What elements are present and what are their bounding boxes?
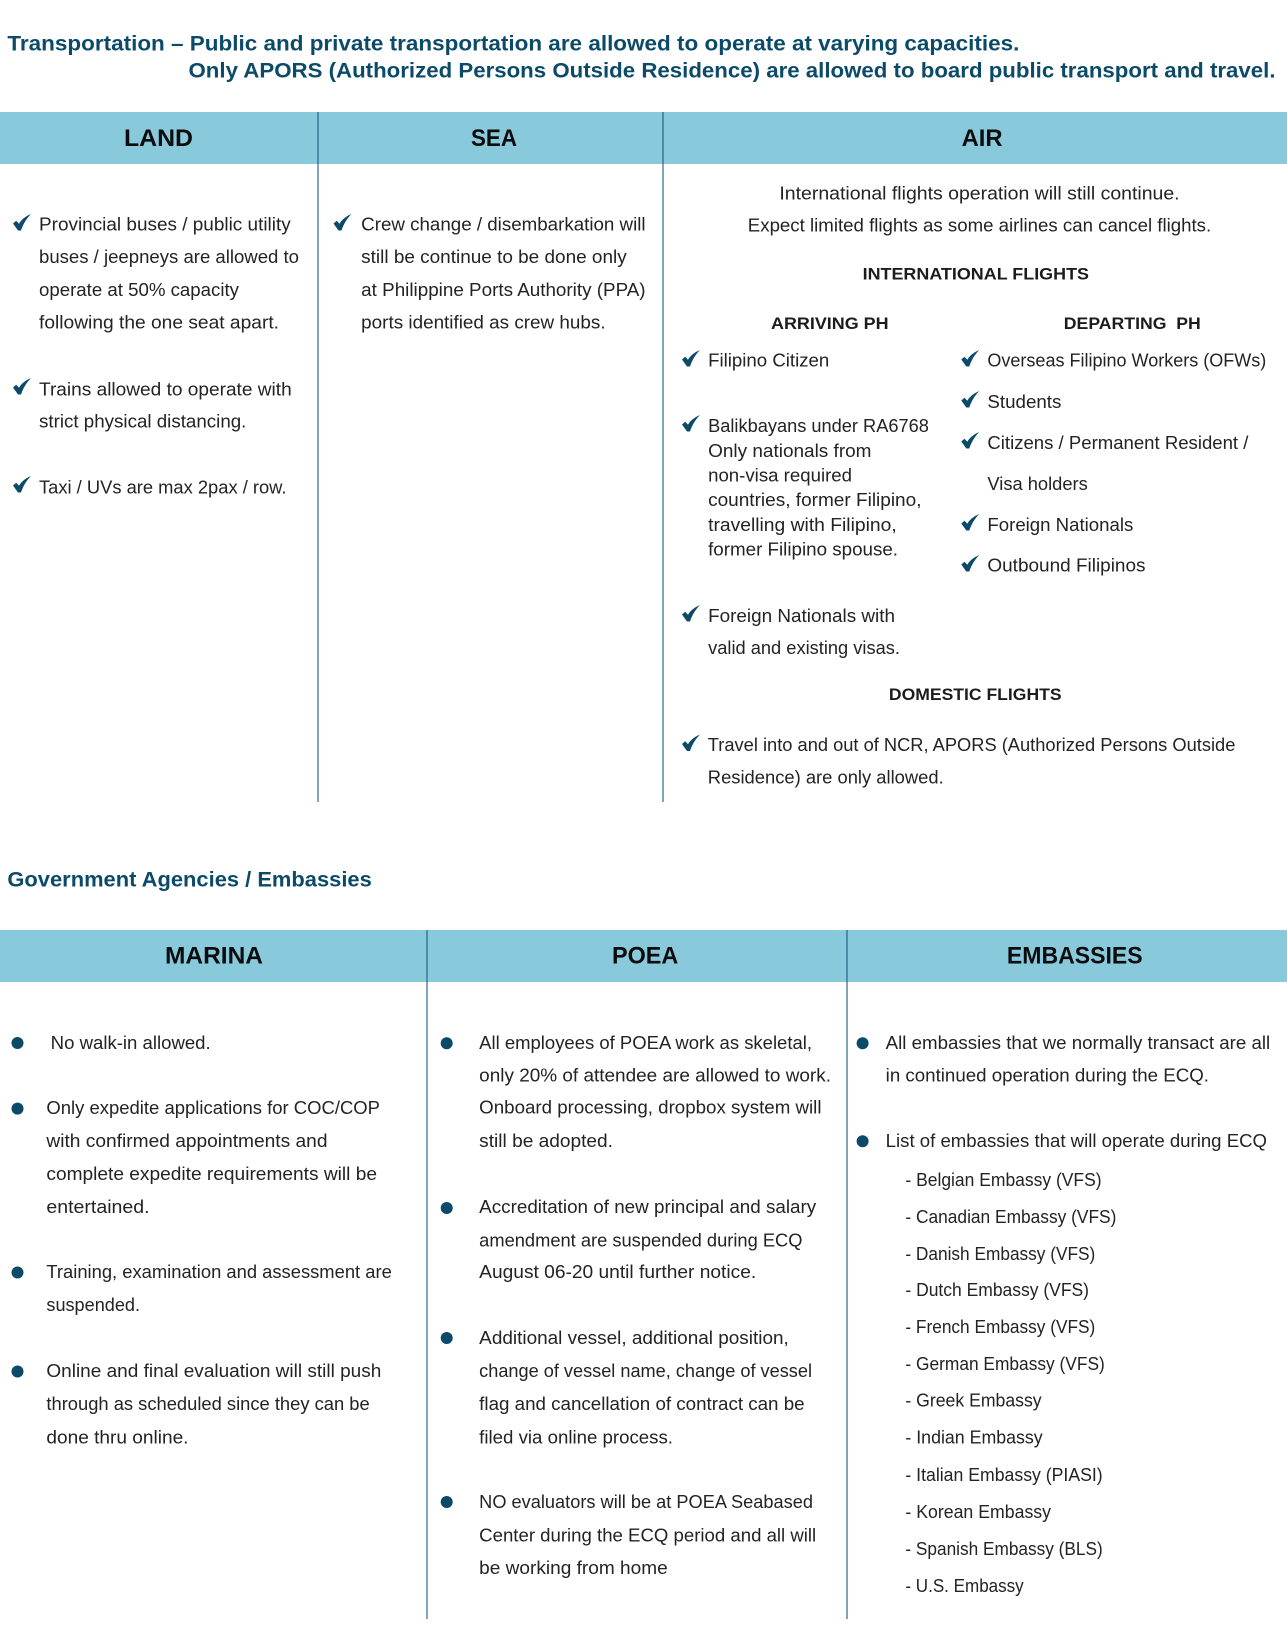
list of embassies — [905, 1170, 1116, 1596]
list of embassies: - French Embassy (VFS) — [905, 1317, 1095, 1337]
item: travel into and out of ncr: Travel into and out of NCR, APORS (Authorized Persons Outside — [708, 735, 1235, 755]
air intro text — [748, 184, 1211, 236]
item: expedite applications: with confirmed appointments and — [45, 1131, 328, 1151]
item: accreditation: August 06-20 until further notice. — [479, 1262, 756, 1282]
header: sea: SEA — [471, 125, 517, 152]
subheading: departing ph: DEPARTING PH — [1064, 314, 1201, 333]
panel: marina — [0, 930, 427, 1448]
item: provincial buses — [13, 214, 299, 333]
header: marina: MARINA — [165, 942, 263, 969]
item: citizens: Citizens / Permanent Resident / — [987, 433, 1248, 453]
item: expedite applications: entertained. — [46, 1197, 150, 1217]
item: no evaluators: Center during the ECQ period and all will — [479, 1526, 816, 1546]
item: crew change: at Philippine Ports Authority (PPA) — [361, 280, 646, 300]
item: no evaluators: NO evaluators will be at POEA Seabased — [479, 1492, 813, 1512]
item: skeletal work: only 20% of attendee are allowed to work. — [479, 1065, 831, 1085]
item: continued operation: in continued operation during the ECQ. — [886, 1065, 1209, 1085]
header: poea: POEA — [612, 942, 678, 969]
item: continued operation: All embassies that we normally transact are all — [886, 1033, 1270, 1053]
header: sea — [318, 112, 663, 164]
list of embassies: - Spanish Embassy (BLS) — [905, 1539, 1103, 1559]
panel: air — [663, 112, 1287, 788]
panel: sea — [318, 112, 663, 333]
item: outbound filipinos: Outbound Filipinos — [987, 556, 1146, 576]
item: continued operation — [857, 1033, 1270, 1085]
item: travel into and out of ncr — [682, 734, 1235, 788]
item: additional vessel: filed via online process. — [479, 1428, 673, 1448]
item: online evaluation — [12, 1361, 381, 1448]
item: crew change — [334, 214, 646, 333]
list of embassies: - German Embassy (VFS) — [905, 1354, 1105, 1374]
item: balikbayans: countries, former Filipino, — [708, 490, 922, 510]
item: crew change: still be continue to be done only — [361, 247, 627, 267]
list of embassies: - Korean Embassy — [905, 1502, 1051, 1522]
title: transportation: Only APORS (Authorized Persons Outside Residence) are allowed to board public transport and travel. — [188, 59, 1276, 82]
item: foreign nationals with visas — [682, 605, 900, 658]
item: balikbayans — [682, 415, 929, 560]
item: trains: Trains allowed to operate with — [39, 379, 292, 399]
item: online evaluation: through as scheduled since they can be — [46, 1394, 370, 1414]
item: online evaluation: done thru online. — [46, 1428, 189, 1448]
item: additional vessel: Additional vessel, additional position, — [479, 1328, 789, 1348]
item: provincial buses: Provincial buses / public utility — [39, 215, 291, 235]
item: no evaluators — [441, 1492, 816, 1578]
item: expedite applications: complete expedite requirements will be — [46, 1164, 377, 1184]
list of embassies: - Italian Embassy (PIASI) — [905, 1465, 1103, 1485]
item: accreditation: amendment are suspended during ECQ — [479, 1231, 802, 1251]
item: additional vessel: flag and cancellation of contract can be — [479, 1394, 805, 1414]
panel: land — [0, 112, 318, 497]
item: list of embassies intro: List of embassies that will operate during ECQ — [886, 1131, 1267, 1151]
item: training — [12, 1262, 392, 1315]
item: skeletal work: Onboard processing, dropbox system will — [479, 1098, 822, 1118]
list of embassies: - Dutch Embassy (VFS) — [905, 1280, 1089, 1300]
item: crew change: Crew change / disembarkation will — [361, 215, 646, 235]
item: skeletal work: All employees of POEA work as skeletal, — [479, 1033, 812, 1053]
title: transportation: Transportation – Public and private transportation are allowed to operate at varying capacities. — [7, 32, 1019, 56]
list of embassies: - Indian Embassy — [905, 1428, 1043, 1448]
item: foreign nationals with visas: Foreign Nationals with — [708, 606, 895, 626]
panel: embassies — [847, 930, 1287, 1596]
item: citizens: Visa holders — [987, 474, 1088, 494]
item: filipino citizen: Filipino Citizen — [708, 351, 829, 371]
air intro text: International flights operation will still continue. — [779, 184, 1180, 204]
header: poea — [427, 930, 847, 982]
list of embassies: - Greek Embassy — [905, 1391, 1042, 1411]
item: travel into and out of ncr: Residence) are only allowed. — [708, 768, 944, 788]
item: skeletal work — [441, 1033, 831, 1151]
item: balikbayans: former Filipino spouse. — [708, 540, 898, 560]
title: transportation — [7, 32, 1275, 82]
item: trains: strict physical distancing. — [39, 412, 246, 432]
header: embassies: EMBASSIES — [1007, 942, 1143, 969]
item: citizens — [961, 432, 1248, 494]
item: training: suspended. — [46, 1295, 140, 1315]
item: students: Students — [987, 392, 1061, 412]
item: no walk-in: No walk-in allowed. — [51, 1033, 211, 1053]
item: expedite applications — [12, 1098, 380, 1217]
item: balikbayans: Balikbayans under RA6768 — [708, 416, 929, 436]
item: provincial buses: buses / jeepneys are allowed to — [39, 247, 299, 267]
header: marina — [0, 930, 427, 982]
item: balikbayans: travelling with Filipino, — [708, 515, 897, 535]
item: accreditation — [441, 1197, 816, 1282]
item: additional vessel: change of vessel name, change of vessel — [479, 1361, 812, 1381]
subheading: domestic flights: DOMESTIC FLIGHTS — [889, 685, 1062, 704]
item: accreditation: Accreditation of new principal and salary — [479, 1197, 816, 1217]
list of embassies: - Danish Embassy (VFS) — [905, 1244, 1095, 1264]
item: ofws: Overseas Filipino Workers (OFWs) — [987, 351, 1266, 371]
header: land — [0, 112, 318, 164]
header: air: AIR — [962, 125, 1003, 152]
item: balikbayans: non-visa required — [708, 466, 852, 486]
item: provincial buses: following the one seat apart. — [39, 313, 279, 333]
list of embassies: - U.S. Embassy — [905, 1576, 1024, 1596]
item: foreign nationals: Foreign Nationals — [987, 515, 1133, 535]
item: skeletal work: still be adopted. — [479, 1131, 613, 1151]
item: expedite applications: Only expedite applications for COC/COP — [46, 1098, 380, 1118]
list of embassies: - Belgian Embassy (VFS) — [905, 1170, 1102, 1190]
item: balikbayans: Only nationals from — [708, 441, 872, 461]
item: trains — [13, 378, 292, 432]
air intro text: Expect limited flights as some airlines can cancel flights. — [748, 216, 1211, 236]
item: provincial buses: operate at 50% capacity — [39, 280, 239, 300]
header: air — [663, 112, 1287, 164]
heading: government agencies: Government Agencies / Embassies — [7, 868, 372, 892]
header: land: LAND — [124, 125, 193, 152]
subheading: arriving ph: ARRIVING PH — [771, 314, 889, 333]
header: embassies — [847, 930, 1287, 982]
item: online evaluation: Online and final evaluation will still push — [46, 1361, 381, 1381]
item: additional vessel — [441, 1328, 812, 1448]
list of embassies: - Canadian Embassy (VFS) — [905, 1207, 1116, 1227]
item: training: Training, examination and assessment are — [46, 1262, 392, 1282]
item: students — [961, 391, 1061, 412]
item: crew change: ports identified as crew hubs. — [361, 313, 606, 333]
subheading: international flights: INTERNATIONAL FLIGHTS — [863, 264, 1089, 283]
item: foreign nationals with visas: valid and existing visas. — [708, 638, 900, 658]
panel: poea — [427, 930, 847, 1578]
item: no evaluators: be working from home — [479, 1558, 668, 1578]
item: taxi: Taxi / UVs are max 2pax / row. — [39, 477, 286, 497]
